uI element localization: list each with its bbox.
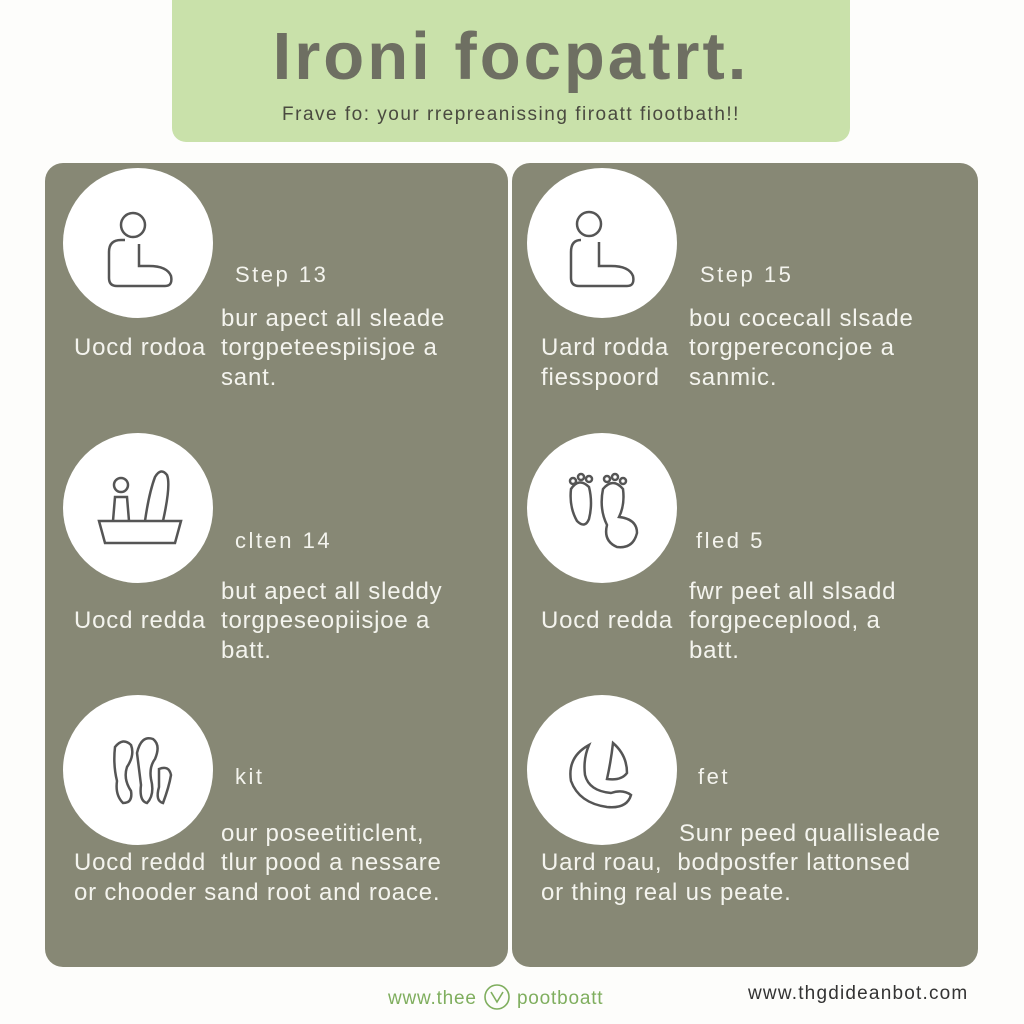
panel: right: batt. — [689, 637, 740, 664]
panel: right: Uard roau, bodpostfer lattonsed — [541, 849, 911, 876]
panel: right: torgpereconcjoe a — [689, 334, 895, 361]
panel: left: torgpeseopiisjoe a — [221, 607, 430, 634]
panel: left: but apect all sleddy — [221, 578, 442, 605]
panel: left: Uocd reddd tlur pood a nessare — [74, 849, 442, 876]
step 14 heading: clten 14 — [235, 528, 332, 553]
step 15 text — [541, 305, 914, 391]
step fled 5 text — [541, 578, 896, 664]
step fet text — [541, 820, 941, 906]
panel: left: bur apect all sleade — [221, 305, 445, 332]
panel: right: fwr peet all slsadd — [689, 578, 896, 605]
panel: left: torgpeteespiisjoe a — [221, 334, 438, 361]
panel: right: forgpeceplood, a — [689, 607, 881, 634]
panel: left: batt. — [221, 637, 272, 664]
panel: left: Uocd redda — [74, 607, 206, 634]
title: Ironi focpatrt. — [273, 19, 749, 94]
icon: person sitting — [63, 168, 213, 318]
panel: right — [512, 163, 978, 967]
step 14 text — [74, 578, 442, 664]
step fled 5 heading: fled 5 — [696, 528, 765, 553]
panel: right: fiesspoord — [541, 364, 660, 391]
icon: crescent — [527, 695, 677, 845]
panel: left: or chooder sand root and roace. — [74, 879, 440, 906]
step 13 text — [74, 305, 445, 391]
panel: left — [45, 163, 508, 967]
icon: feet — [63, 695, 213, 845]
step kit heading: kit — [235, 764, 264, 789]
header banner — [172, 0, 850, 142]
panel: left: Uocd rodoa — [74, 334, 206, 361]
footer: right url: www.thgdideanbot.com — [748, 983, 968, 1004]
step 13 heading: Step 13 — [235, 262, 328, 287]
icon: person sitting — [527, 168, 677, 318]
icon: feet soles — [527, 433, 677, 583]
panel: left: our poseetiticlent, — [221, 820, 424, 847]
icon: footbath — [63, 433, 213, 583]
step kit text — [74, 820, 442, 906]
panel: right: Uocd redda — [541, 607, 673, 634]
footer: left brand: www.thee pootboatt — [388, 988, 603, 1009]
step 15 heading: Step 15 — [700, 262, 793, 287]
subtitle: Frave fo: your rrepreanissing firoatt fiootbath!! — [282, 104, 740, 125]
panel: right: or thing real us peate. — [541, 879, 792, 906]
step fet heading: fet — [698, 764, 730, 789]
panel: right: sanmic. — [689, 364, 777, 391]
panel: right: bou cocecall slsade — [689, 305, 914, 332]
panel: left: sant. — [221, 364, 277, 391]
panel: right: Uard rodda — [541, 334, 669, 361]
panel: right: Sunr peed quallisleade — [679, 820, 941, 847]
